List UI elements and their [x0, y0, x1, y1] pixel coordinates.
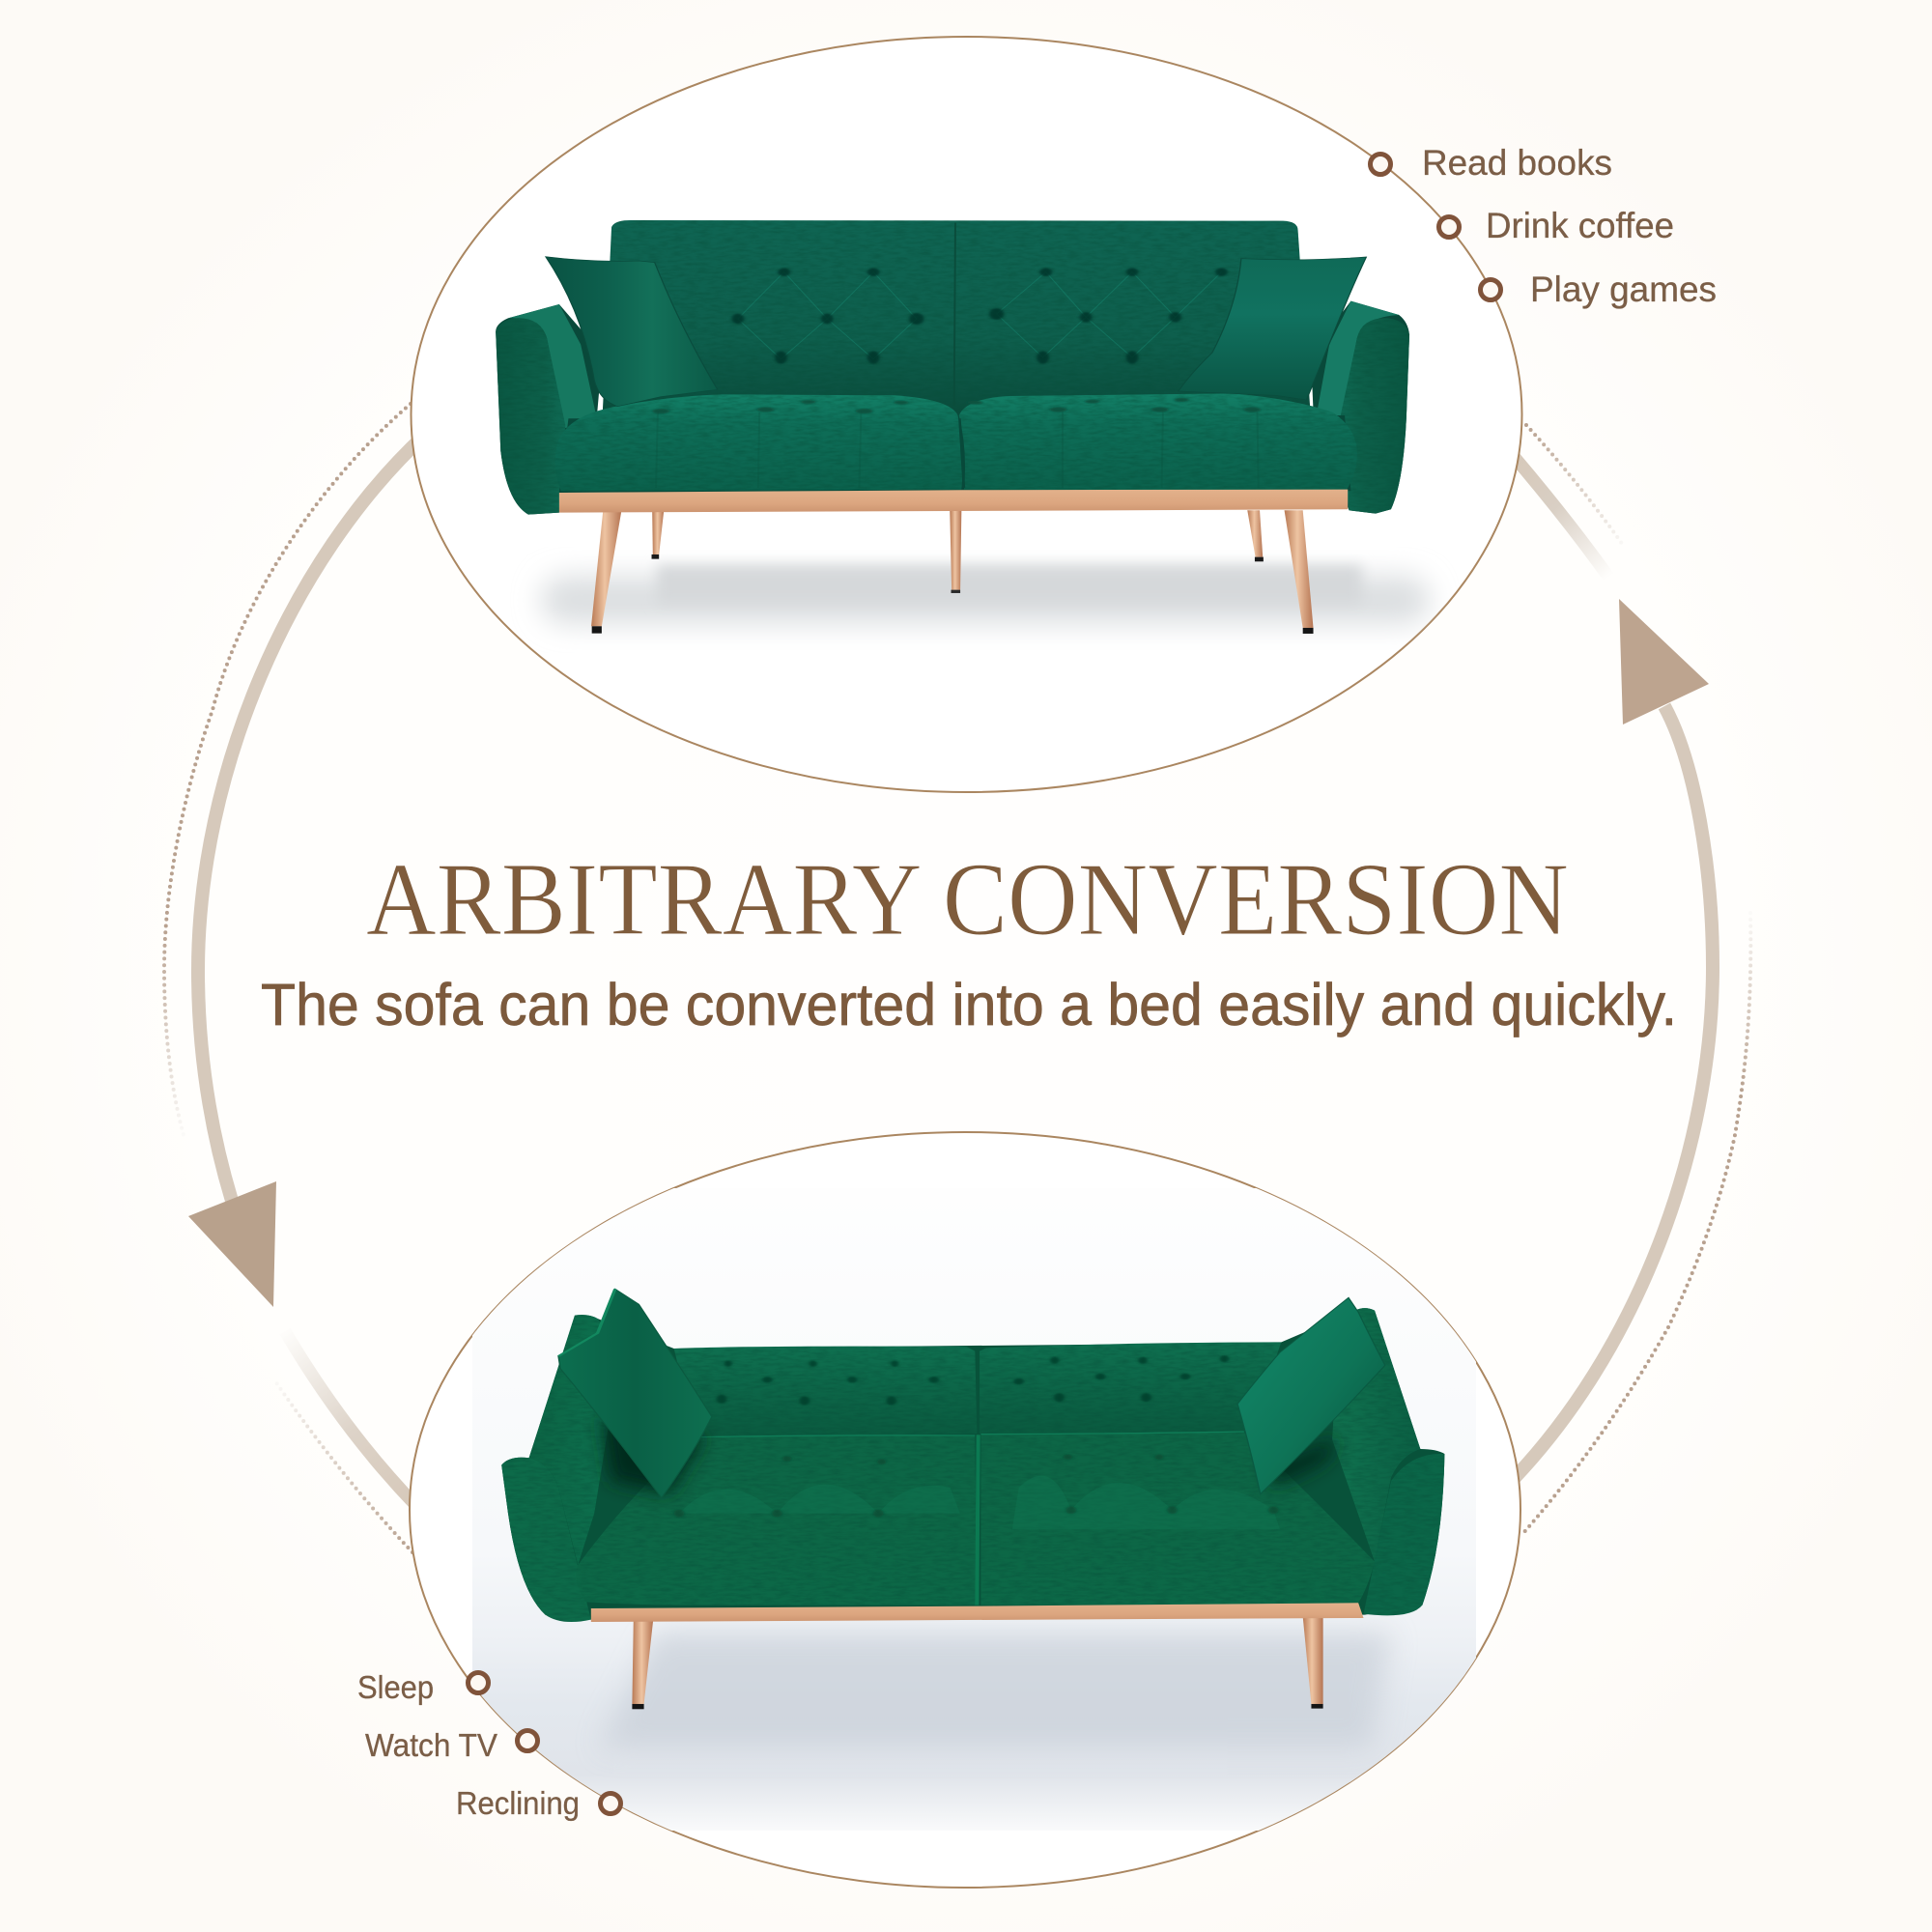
right arm front: [1339, 318, 1409, 514]
seat backing: [559, 415, 1350, 493]
cycle ring: arrows and dotted arcs: [164, 404, 1750, 1552]
rail: [559, 490, 1348, 513]
floor shadow: top: [541, 565, 1430, 624]
left arm panel: [529, 1315, 620, 1565]
right arm panel: [1332, 1308, 1420, 1562]
right arm silhouette: [1311, 301, 1409, 514]
dotted arc: left: [164, 404, 411, 1135]
bullet markers: bottom: [468, 1673, 620, 1814]
sofa photo: flat bed view: [501, 1289, 1444, 1709]
right arm inner panel: [1317, 301, 1399, 428]
seat tufting: [652, 398, 1261, 488]
dotted arc: upper-right: [1526, 425, 1625, 548]
seat tufting: [674, 1432, 1280, 1605]
back panels: [674, 1342, 1281, 1437]
left arm inner panel: [508, 304, 596, 428]
ellipse frame: bottom: [410, 1132, 1520, 1888]
bullet markers: top: [1370, 155, 1501, 299]
label list: uses in bed mode: Reclining: [456, 1785, 580, 1821]
panel: bed mode: [357, 1132, 1520, 1888]
photo floor: bottom: [472, 1188, 1476, 1831]
pillow shadows: [601, 1417, 1339, 1494]
left arm silhouette: [496, 304, 603, 515]
label list: uses in bed mode: Watch TV: [365, 1727, 497, 1763]
left arm front: [501, 1458, 591, 1622]
legs: [591, 510, 1314, 634]
dotted arc: lower-left: [273, 1378, 412, 1552]
panel: sofa mode: [412, 37, 1717, 792]
infographic canvas: [162, 36, 1752, 1889]
left pillow: [546, 257, 718, 407]
title: ARBITRARY CONVERSION: [366, 842, 1569, 957]
legs: [632, 1616, 1323, 1709]
seat cushions: [555, 393, 1357, 491]
seat panels: [576, 1433, 1375, 1605]
label list: uses in bed mode: Sleep: [357, 1669, 434, 1705]
arc: lower-left fading: [285, 1331, 417, 1507]
back tufting: [717, 1355, 1229, 1406]
dotted arc: right: [1523, 913, 1750, 1533]
ellipse frame: top: [412, 37, 1522, 792]
arc: left main: [198, 435, 425, 1201]
label list: uses in sofa mode: Read books: [1422, 143, 1612, 183]
body infill: [501, 1308, 1444, 1620]
arrowhead: right: [1619, 599, 1709, 724]
sofa photo: front view: [496, 220, 1409, 634]
arrowhead: left: [188, 1181, 276, 1307]
subtitle: The sofa can be converted into a bed easily and quickly.: [261, 972, 1677, 1037]
right arm: [1311, 301, 1409, 514]
left arm: [496, 304, 603, 515]
arc: upper-right fading: [1512, 454, 1608, 577]
right pillow: [1237, 1297, 1385, 1494]
label list: uses in sofa mode: Drink coffee: [1486, 206, 1674, 245]
right arm front: [1364, 1454, 1444, 1615]
label list: uses in sofa mode: Play games: [1530, 270, 1717, 309]
left pillow highlight seam: [558, 1289, 615, 1356]
left arm front: [496, 318, 565, 515]
backrest seam and tufting: [731, 223, 1228, 406]
right pillow: [1179, 257, 1366, 400]
backrest: [603, 220, 1311, 418]
rail: [591, 1603, 1364, 1622]
label list: uses in sofa mode: [1422, 143, 1717, 309]
left pillow: [558, 1289, 712, 1498]
arc: right main: [1507, 706, 1713, 1486]
label list: uses in bed mode: [357, 1669, 580, 1821]
